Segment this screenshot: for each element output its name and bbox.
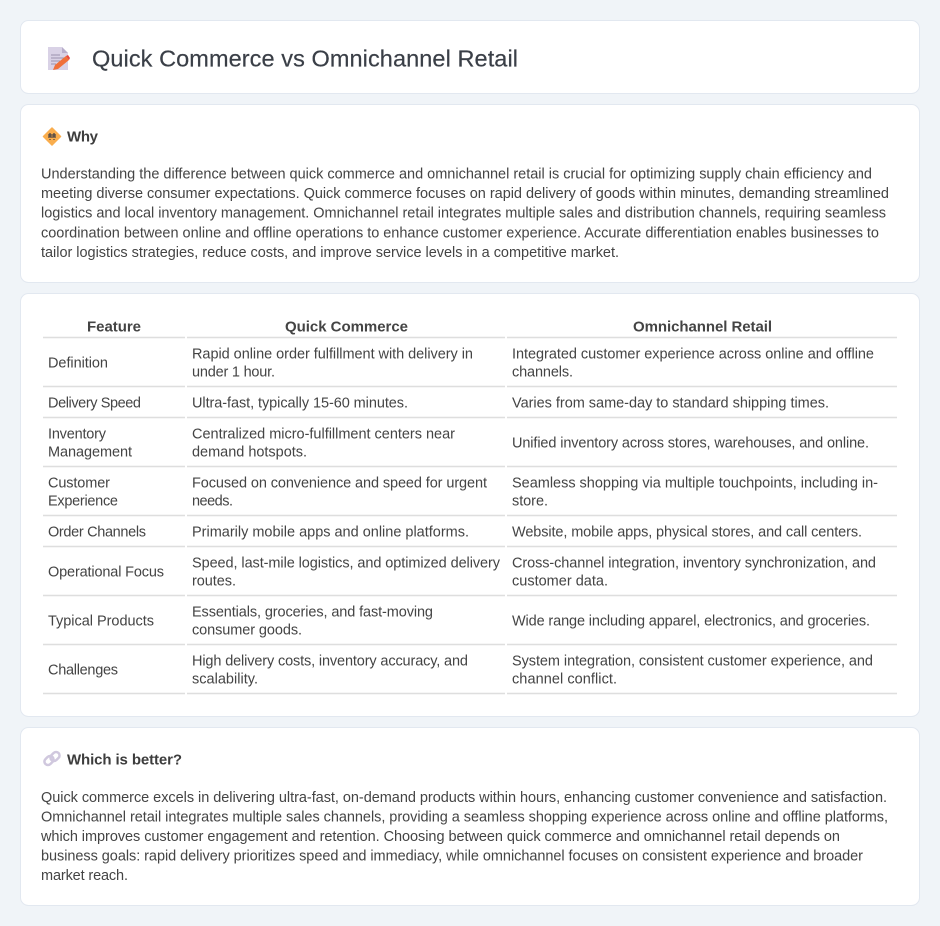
text block: which is better	[40, 790, 888, 884]
panel: header	[20, 20, 920, 94]
row: order channels: Primarily mobile apps and online platforms.	[192, 524, 469, 540]
row: definition: Rapid online order fulfillment with delivery in	[192, 346, 473, 362]
title: Quick Commerce vs Omnichannel Retail	[92, 46, 518, 72]
row: delivery speed	[48, 396, 829, 412]
row: challenges: scalability.	[192, 672, 258, 688]
row: inventory management: Inventory	[48, 426, 107, 442]
row: customer experience: Customer	[48, 476, 110, 492]
row: definition: channels.	[512, 364, 573, 380]
table header: Quick Commerce	[285, 318, 408, 336]
heading: which is better: Which is better?	[67, 752, 182, 768]
row: challenges: channel conflict.	[512, 672, 617, 688]
text block: which is better: which improves customer engagement and retention. Choosing between quick commerce and omnichannel retail depends on	[40, 829, 840, 845]
row: typical products	[48, 604, 870, 638]
text block: why: coordination between online and offline operations to enhance customer experience. Accurate differentiation enables businesses to	[41, 225, 879, 241]
row: operational focus: routes.	[192, 574, 236, 590]
row: customer experience: store.	[512, 494, 548, 510]
row: customer experience: Experience	[48, 494, 118, 510]
text block: why: tailor logistics strategies, reduce costs, and improve service levels in a competitive market.	[41, 245, 619, 261]
row: order channels	[48, 524, 862, 540]
row: challenges: High delivery costs, inventory accuracy, and	[192, 654, 468, 670]
row: operational focus	[48, 556, 876, 590]
row: definition: Definition	[48, 356, 108, 372]
panel: which is better	[20, 728, 920, 906]
table header: Feature	[87, 318, 141, 336]
row: operational focus: customer data.	[512, 574, 608, 590]
row: operational focus: Operational Focus	[48, 564, 164, 580]
row: inventory management: demand hotspots.	[192, 444, 307, 460]
row: delivery speed: Ultra-fast, typically 15-60 minutes.	[192, 396, 408, 412]
icon: warning diamond	[44, 128, 60, 145]
text block: which is better: business goals: rapid delivery prioritizes speed and immediacy, while omnichannel focuses on consistent experience and broader	[41, 849, 863, 865]
panel: why	[20, 104, 920, 282]
row: customer experience: needs.	[192, 494, 233, 510]
row: delivery speed: Delivery Speed	[48, 396, 141, 412]
row: order channels: Order Channels	[48, 524, 146, 540]
row: inventory management: Centralized micro-fulfillment centers near	[192, 426, 455, 442]
row: challenges: Challenges	[48, 662, 118, 678]
heading: why: Why	[67, 128, 99, 146]
row: operational focus: Speed, last-mile logistics, and optimized delivery	[192, 556, 501, 572]
text block: which is better: market reach.	[41, 868, 128, 884]
row: operational focus: Cross-channel integration, inventory synchronization, and	[512, 556, 876, 572]
row: challenges: System integration, consistent customer experience, and	[512, 654, 873, 670]
row: customer experience	[48, 476, 878, 510]
icon: memo with pencil	[48, 47, 70, 70]
text block: why: logistics and local inventory management. Omnichannel retail integrates multiple sales and distribution channels, requiring seamless	[41, 206, 886, 222]
table header	[87, 318, 772, 336]
row: typical products: Essentials, groceries, and fast-moving	[192, 604, 433, 620]
text block: which is better: Quick commerce excels in delivering ultra-fast, on-demand products within hours, enhancing customer convenience and satisfaction.	[41, 790, 887, 806]
text block: why	[41, 166, 889, 261]
text block: which is better: Omnichannel retail integrates multiple sales channels, providing a seamless shopping experience across online and offline platforms,	[41, 809, 888, 825]
row: typical products: Typical Products	[48, 614, 154, 630]
row: definition	[48, 346, 874, 380]
panel: comparison table	[20, 294, 920, 716]
row: challenges	[48, 654, 873, 688]
row: definition: under 1 hour.	[192, 364, 275, 380]
text block: why: meeting diverse consumer expectations. Quick commerce focuses on rapid delivery of goods within minutes, demanding streamlined	[41, 186, 889, 202]
row: definition: Integrated customer experience across online and offline	[512, 346, 874, 362]
row: order channels: Website, mobile apps, physical stores, and call centers.	[512, 524, 862, 540]
row: typical products: consumer goods.	[192, 622, 302, 638]
row: inventory management	[48, 426, 869, 460]
table header: Omnichannel Retail	[633, 318, 772, 336]
icon: link	[43, 750, 61, 767]
text block: why: Understanding the difference between quick commerce and omnichannel retail is crucial for optimizing supply chain efficiency and	[41, 166, 872, 182]
row: inventory management: Unified inventory across stores, warehouses, and online.	[512, 436, 869, 452]
row: inventory management: Management	[48, 444, 132, 460]
row: delivery speed: Varies from same-day to standard shipping times.	[512, 396, 829, 412]
row: customer experience: Focused on convenience and speed for urgent	[192, 476, 487, 492]
row: typical products: Wide range including apparel, electronics, and groceries.	[512, 614, 870, 630]
row: customer experience: Seamless shopping via multiple touchpoints, including in-	[512, 476, 878, 492]
